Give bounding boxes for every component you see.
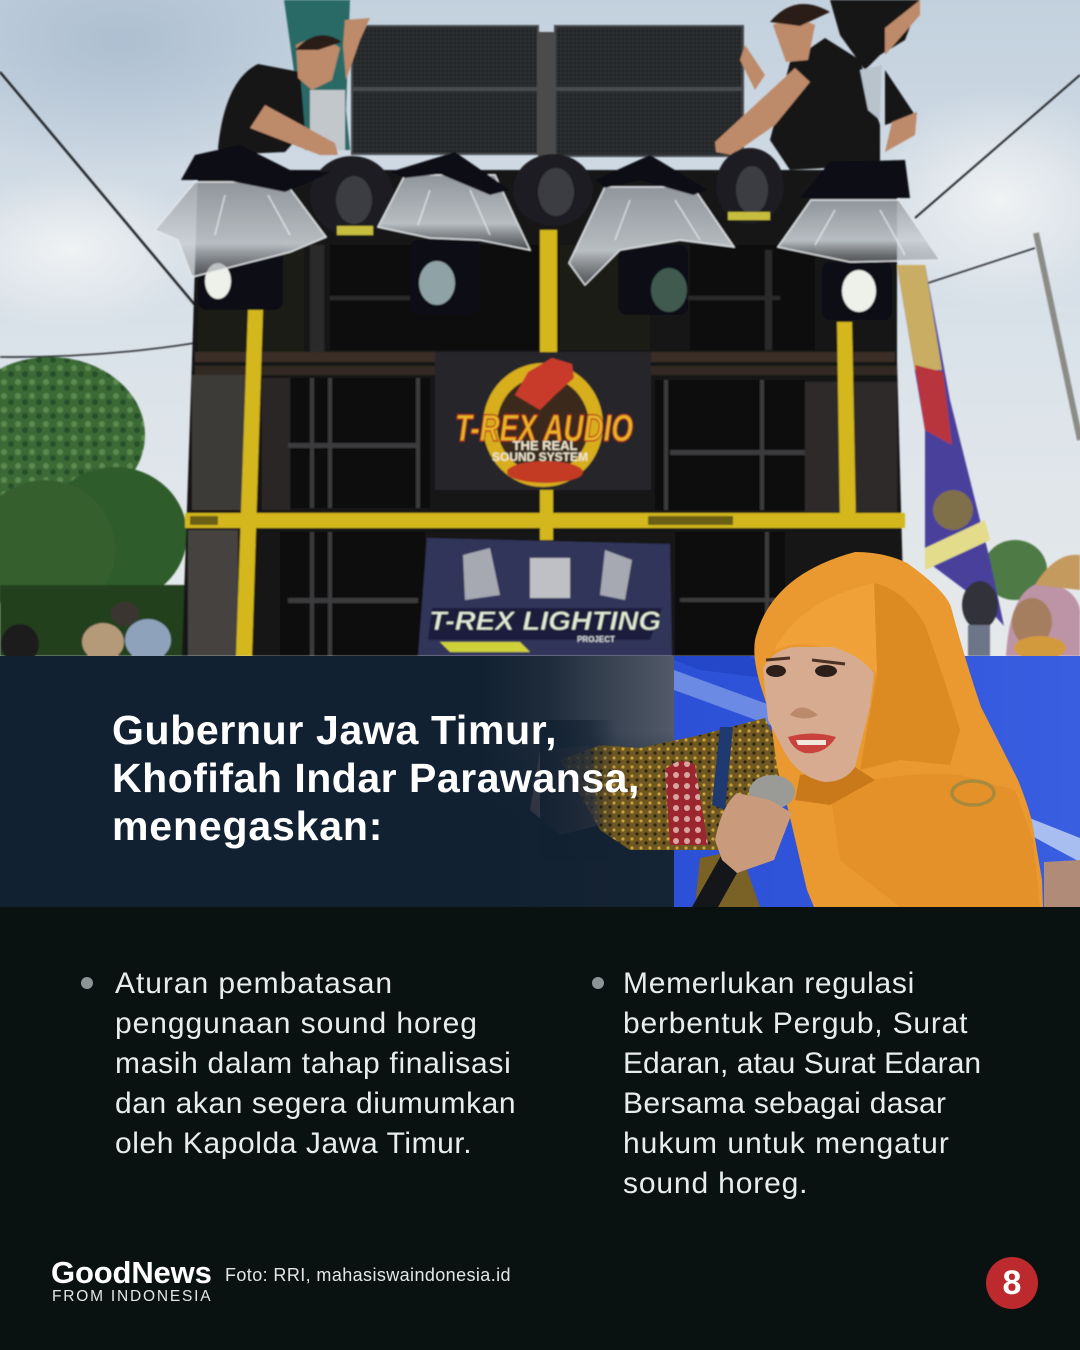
bottom tier: [188, 530, 238, 656]
banner: [897, 265, 1004, 626]
hijab: [754, 552, 1043, 907]
yellow frame: [185, 230, 905, 656]
photo credit: Foto: RRI, mahasiswaindonesia.id: [225, 1265, 511, 1285]
band photo background: [526, 656, 1080, 907]
right bullet text: Bersama sebagai dasar: [623, 1087, 946, 1120]
right bullet text: hukum untuk mengatur: [623, 1127, 950, 1160]
top speakers: [352, 26, 743, 156]
headline: menegaskan:: [112, 803, 383, 849]
black hoods: [181, 145, 910, 198]
governor portrait: [692, 552, 1043, 907]
wires: [0, 72, 1080, 357]
page number badge: 8: [1003, 1264, 1021, 1302]
face: [763, 647, 874, 782]
banner: T-Rex Lighting: T-REX LIGHTING: [429, 606, 661, 636]
banner: T-Rex Audio: T-REX AUDIO: [455, 408, 633, 450]
photo: sound horeg speaker stack: [0, 0, 1080, 656]
trees right: [983, 540, 1047, 600]
left bullet text: oleh Kapolda Jawa Timur.: [115, 1127, 472, 1160]
stage lights with plastic covers: [155, 145, 940, 320]
banner: T-Rex Audio: THE REAL: [512, 438, 578, 453]
hand: [715, 793, 792, 873]
left bullet text: dan akan segera diumumkan: [115, 1087, 516, 1120]
right bullet: [592, 967, 981, 1200]
lower tier: [192, 375, 248, 510]
left bullet text: penggunaan sound horeg: [115, 1007, 478, 1040]
headline: [112, 707, 640, 849]
bullet dot: [81, 977, 93, 989]
upper tier: [198, 240, 304, 352]
left bullet text: masih dalam tahap finalisasi: [115, 1047, 511, 1080]
page number badge: [986, 1257, 1038, 1309]
banner: T-Rex Audio: SOUND SYSTEM: [492, 450, 588, 464]
logo: GoodNews from Indonesia: [51, 1255, 212, 1305]
headline band with governor photo: [0, 656, 1080, 907]
hanging lamps: [310, 148, 784, 236]
bullet dot: [592, 977, 604, 989]
banner: T-Rex Lighting: [418, 538, 672, 656]
logo: GoodNews from Indonesia: FROM INDONESIA: [52, 1288, 212, 1305]
left bullet text: Aturan pembatasan: [115, 967, 393, 1000]
plastic rain covers: [155, 175, 940, 285]
left bullet: [81, 967, 516, 1160]
brooch: [952, 781, 994, 805]
crowd: [1, 555, 1080, 664]
right bullet text: Edaran, atau Surat Edaran: [623, 1047, 981, 1080]
right bullet text: berbentuk Pergub, Surat: [623, 1007, 968, 1040]
banner: T-Rex Lighting: PROJECT: [577, 635, 615, 644]
headline: Khofifah Indar Parawansa,: [112, 755, 640, 801]
left bullet text: [115, 967, 516, 1160]
right bullet text: Memerlukan regulasi: [623, 967, 915, 1000]
right bullet text: sound horeg.: [623, 1167, 808, 1200]
speaker stack body: [182, 170, 905, 656]
banner: T-Rex Audio: [435, 352, 651, 490]
trees left: [0, 357, 190, 656]
fixtures: [198, 235, 892, 320]
people on top: [284, 0, 350, 150]
logo: GoodNews from Indonesia: GoodNews: [51, 1255, 212, 1290]
headline: Gubernur Jawa Timur,: [112, 707, 557, 753]
right bullet text: [623, 967, 981, 1200]
microphone: [692, 847, 737, 907]
